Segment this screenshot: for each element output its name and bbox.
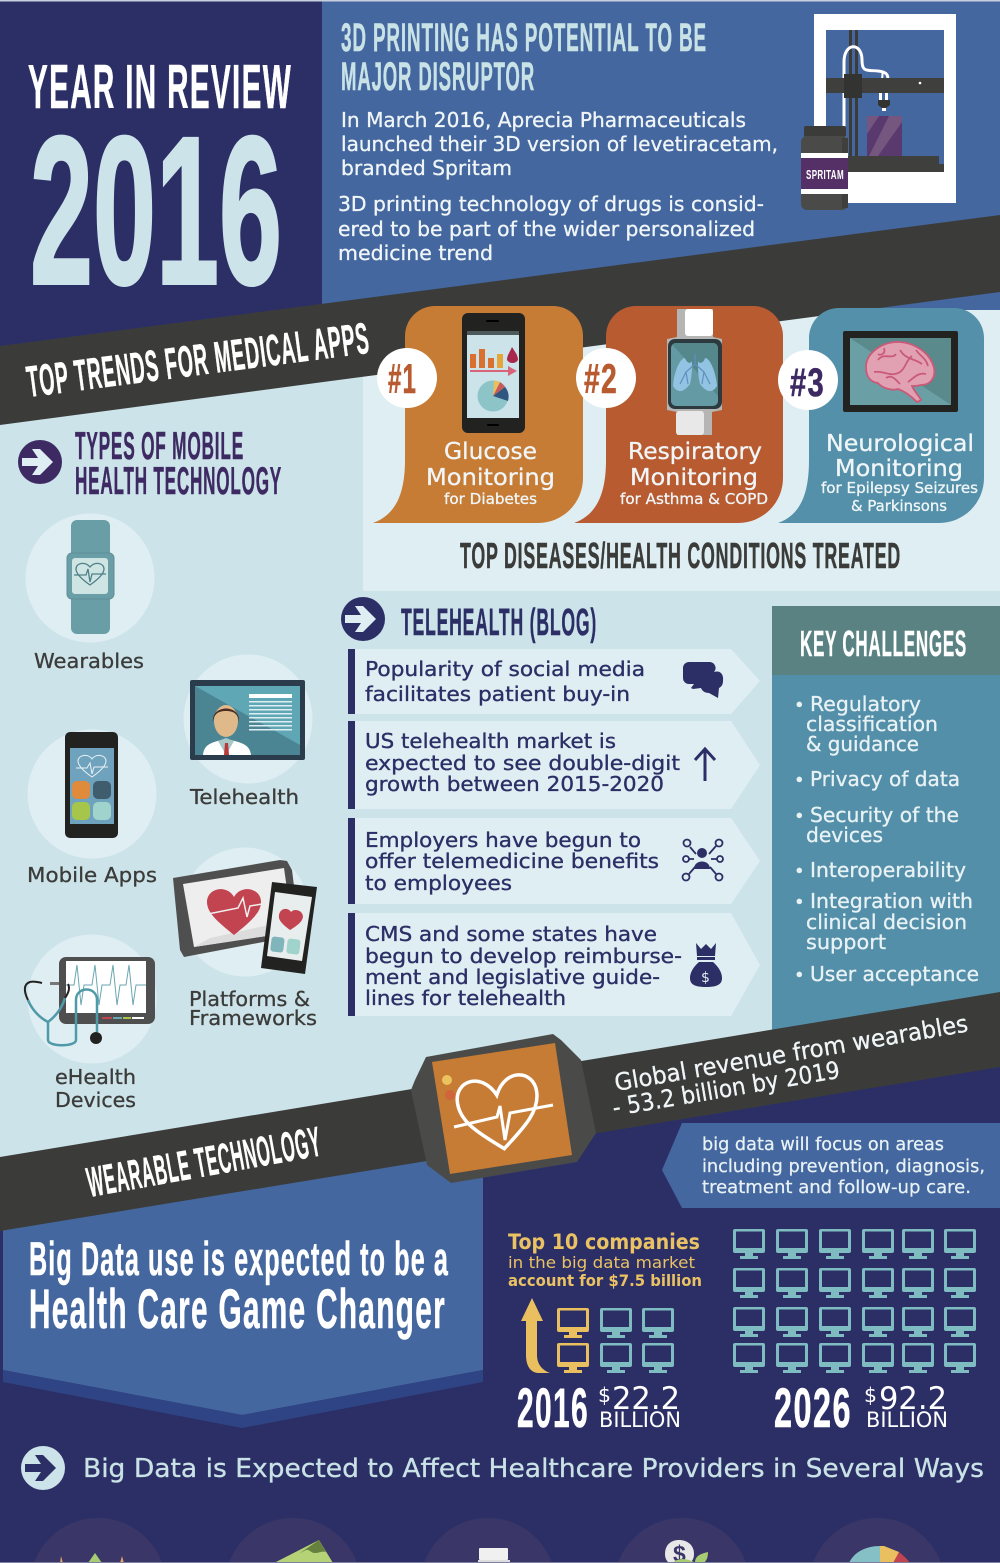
- list: key challenges: •: [794, 892, 805, 913]
- list: key challenges: support: [806, 930, 886, 954]
- text: top 10 companies: Top 10 companies: [508, 1230, 700, 1254]
- text: top 10 companies: [508, 1230, 702, 1290]
- text: neurological: for Epilepsy Seizures: [821, 479, 978, 497]
- icon grid: 2016 monitors: [557, 1308, 674, 1373]
- header: navy title panel: [0, 0, 322, 360]
- row: market growth: expected to see double-digit: [365, 751, 680, 775]
- heading: big data affects providers: Big Data is Expected to Affect Healthcare Providers in Several Ways: [83, 1454, 984, 1484]
- heading: big data game changer: Health Care Game Changer: [29, 1277, 446, 1340]
- row: market growth: US telehealth market is: [365, 729, 616, 753]
- icon: smartwatch on banner: [411, 1034, 596, 1183]
- text: respiratory: for Asthma & COPD: [620, 490, 768, 508]
- item: platforms and frameworks: [173, 848, 317, 1030]
- heading: big data game changer: [29, 1232, 449, 1340]
- badge #1: [377, 348, 437, 408]
- icon: provider circle 4: [618, 1518, 746, 1563]
- badge #1: #1: [388, 355, 417, 402]
- list: key challenges: Privacy of data: [810, 767, 960, 791]
- row: employers: [348, 818, 760, 904]
- text: respiratory: [620, 439, 768, 508]
- item: ehealth devices: Devices: [55, 1088, 136, 1112]
- badge #2: #2: [584, 355, 618, 402]
- row: social media: Popularity of social media: [365, 657, 645, 681]
- text: TELEHEALTH (BLOG): [401, 602, 597, 644]
- row: CMS: [348, 913, 760, 1016]
- title: 2016: 2016: [30, 92, 282, 328]
- stat: 2016 market: BILLION: [599, 1408, 681, 1432]
- card #2: respiratory monitoring: [574, 306, 783, 523]
- banner: top trends: [0, 215, 1000, 425]
- bottom edge line: [0, 1562, 1000, 1563]
- stat: 2026 market: BILLION: [866, 1408, 948, 1432]
- list: key challenges: •: [794, 806, 805, 827]
- text: HEALTH TECHNOLOGY: [75, 460, 282, 503]
- text block: 3D printing body: In March 2016, Aprecia Pharmaceuticals: [341, 108, 746, 132]
- panel: top diseases background: [363, 290, 1000, 591]
- text: top 10 companies: account for $7.5 billion: [508, 1271, 702, 1290]
- text block: 3D printing body: [338, 108, 778, 265]
- item: wearables: [26, 514, 154, 673]
- icon: 3D printer and Spritam bottle: [801, 14, 956, 210]
- text: global revenue: Global revenue from wearables: [612, 1010, 970, 1097]
- row: employers: to employees: [365, 871, 512, 895]
- item: platforms and frameworks: Frameworks: [189, 1006, 317, 1030]
- icon grid: 2026 monitors: [733, 1229, 976, 1373]
- row: CMS: CMS and some states have: [365, 922, 657, 946]
- icon: 3D printer and Spritam bottle: SPRITAM: [806, 167, 844, 182]
- icon: gold growth arrow: [521, 1298, 550, 1373]
- text: respiratory: Respiratory: [628, 439, 762, 465]
- list: key challenges: classification: [806, 712, 938, 736]
- list: key challenges: clinical decision: [806, 910, 967, 934]
- banner: wearable technology: [0, 992, 1000, 1231]
- item: mobile apps: Mobile Apps: [27, 863, 157, 887]
- row: social media: [348, 649, 760, 714]
- navy lower section: [0, 1050, 1000, 1563]
- banner: top trends: TOP TRENDS FOR MEDICAL APPS: [24, 314, 372, 407]
- item: wearables: Wearables: [34, 649, 144, 673]
- text: glucose: for Diabetes: [444, 490, 537, 508]
- text: glucose: [426, 439, 555, 508]
- icon: provider circle 2: [229, 1518, 357, 1563]
- list: key challenges: •: [794, 861, 805, 882]
- item: platforms and frameworks: Platforms &: [189, 987, 310, 1011]
- badge #2: [576, 348, 636, 408]
- text: global revenue: - 53.2 billion by 2019: [610, 1056, 842, 1122]
- card #1: glucose monitoring: [373, 306, 583, 523]
- panel: key challenges header: [772, 606, 1000, 675]
- icon: provider circle 5: [813, 1518, 941, 1563]
- item: ehealth devices: [25, 934, 156, 1112]
- row: social media: facilitates patient buy-in: [365, 682, 630, 706]
- list: key challenges: Interoperability: [810, 858, 966, 882]
- heading: big data game changer: Big Data use is expected to be a: [29, 1232, 449, 1285]
- list: key challenges: •: [794, 770, 805, 791]
- list: key challenges: Regulatory: [810, 692, 921, 716]
- row: employers: Employers have begun to: [365, 828, 641, 852]
- text block: 3D printing body: ered to be part of the wider personalized: [338, 217, 755, 241]
- item: telehealth: [184, 654, 312, 809]
- list: key challenges: User acceptance: [810, 962, 979, 986]
- callout: big data focus: big data will focus on areas: [702, 1134, 944, 1155]
- header: blue 3D printing panel: [322, 0, 1000, 310]
- card #3: neurological monitoring: [778, 308, 984, 523]
- stat: 2026 market: 92.2: [879, 1381, 947, 1417]
- icon: money bag: $: [701, 970, 710, 986]
- stat: 2016 market: 22.2: [612, 1381, 680, 1417]
- stat: 2016 market: $: [598, 1383, 611, 1407]
- icon: network of people: [682, 840, 723, 880]
- item: telehealth: Telehealth: [189, 785, 299, 809]
- heading: types of mobile health technology: [18, 425, 282, 503]
- callout: big data focus: treatment and follow-up care.: [702, 1177, 971, 1198]
- stat: 2026 market: $: [864, 1383, 877, 1407]
- panel fold: big data: [3, 1370, 483, 1428]
- item: ehealth devices: eHealth: [55, 1065, 136, 1089]
- row: market growth: [348, 721, 760, 809]
- icon: tablet with brain: [843, 331, 958, 412]
- text: neurological: Monitoring: [835, 456, 963, 482]
- text: respiratory: Monitoring: [630, 465, 758, 491]
- blue panel: big data: [3, 1100, 483, 1415]
- callout: big data focus: including prevention, diagnosis,: [702, 1156, 985, 1177]
- heading: 3D printing: [341, 16, 707, 99]
- list: key challenges: Security of the: [810, 803, 959, 827]
- text: neurological: [821, 431, 978, 515]
- text block: 3D printing body: launched their 3D version of levetiracetam,: [341, 132, 778, 156]
- text: glucose: Monitoring: [426, 465, 555, 491]
- icon: money bag: [690, 943, 722, 987]
- heading: telehealth blog: [341, 597, 597, 644]
- text block: 3D printing body: branded Spritam: [341, 156, 512, 180]
- row: CMS: ment and legislative guide-: [365, 965, 660, 989]
- heading: types of mobile health technology: TYPES OF MOBILE: [75, 425, 244, 468]
- callout: big data focus: [662, 1123, 1000, 1208]
- top edge line: [0, 0, 1000, 2]
- item: mobile apps: [27, 730, 157, 887]
- text block: 3D printing body: medicine trend: [338, 241, 493, 265]
- row: CMS: begun to develop reimburse-: [365, 944, 682, 968]
- icon: up arrow: [695, 749, 715, 781]
- icon: provider circle 1: [34, 1518, 162, 1563]
- row: market growth: growth between 2015-2020: [365, 772, 664, 796]
- badge #3: [778, 350, 838, 410]
- list: key challenges: devices: [806, 823, 883, 847]
- list: key challenges: •: [794, 965, 805, 986]
- icon: watch with lungs: [667, 309, 722, 435]
- icon: provider circle 3: [424, 1518, 552, 1563]
- icon: speech bubbles: [683, 662, 723, 698]
- row: CMS: lines for telehealth: [365, 986, 566, 1010]
- heading: 3D printing: MAJOR DISRUPTOR: [341, 55, 535, 99]
- icon: phone with chart: [462, 313, 525, 433]
- text: YEAR IN REVIEW: [28, 53, 292, 122]
- panel: key challenges body: [772, 675, 1000, 1035]
- list: key challenges: [794, 692, 979, 986]
- badge #3: #3: [790, 361, 825, 405]
- banner: wearable technology: WEARABLE TECHNOLOGY: [83, 1118, 325, 1206]
- stat: 2026 market: 2026: [774, 1376, 852, 1439]
- text: glucose: Glucose: [444, 439, 537, 465]
- list: key challenges: & guidance: [806, 732, 919, 756]
- text: neurological: Neurological: [826, 431, 974, 457]
- stat: 2016 market: 2016: [517, 1376, 589, 1439]
- list: key challenges: Integration with: [810, 889, 973, 913]
- text: neurological: & Parkinsons: [851, 497, 947, 515]
- list: key challenges: •: [794, 695, 805, 716]
- text: top 10 companies: in the big data market: [508, 1253, 695, 1272]
- row: employers: offer telemedicine benefits: [365, 849, 659, 873]
- text block: 3D printing body: 3D printing technology of drugs is consid-: [338, 192, 764, 216]
- heading: big data affects providers: [21, 1446, 984, 1490]
